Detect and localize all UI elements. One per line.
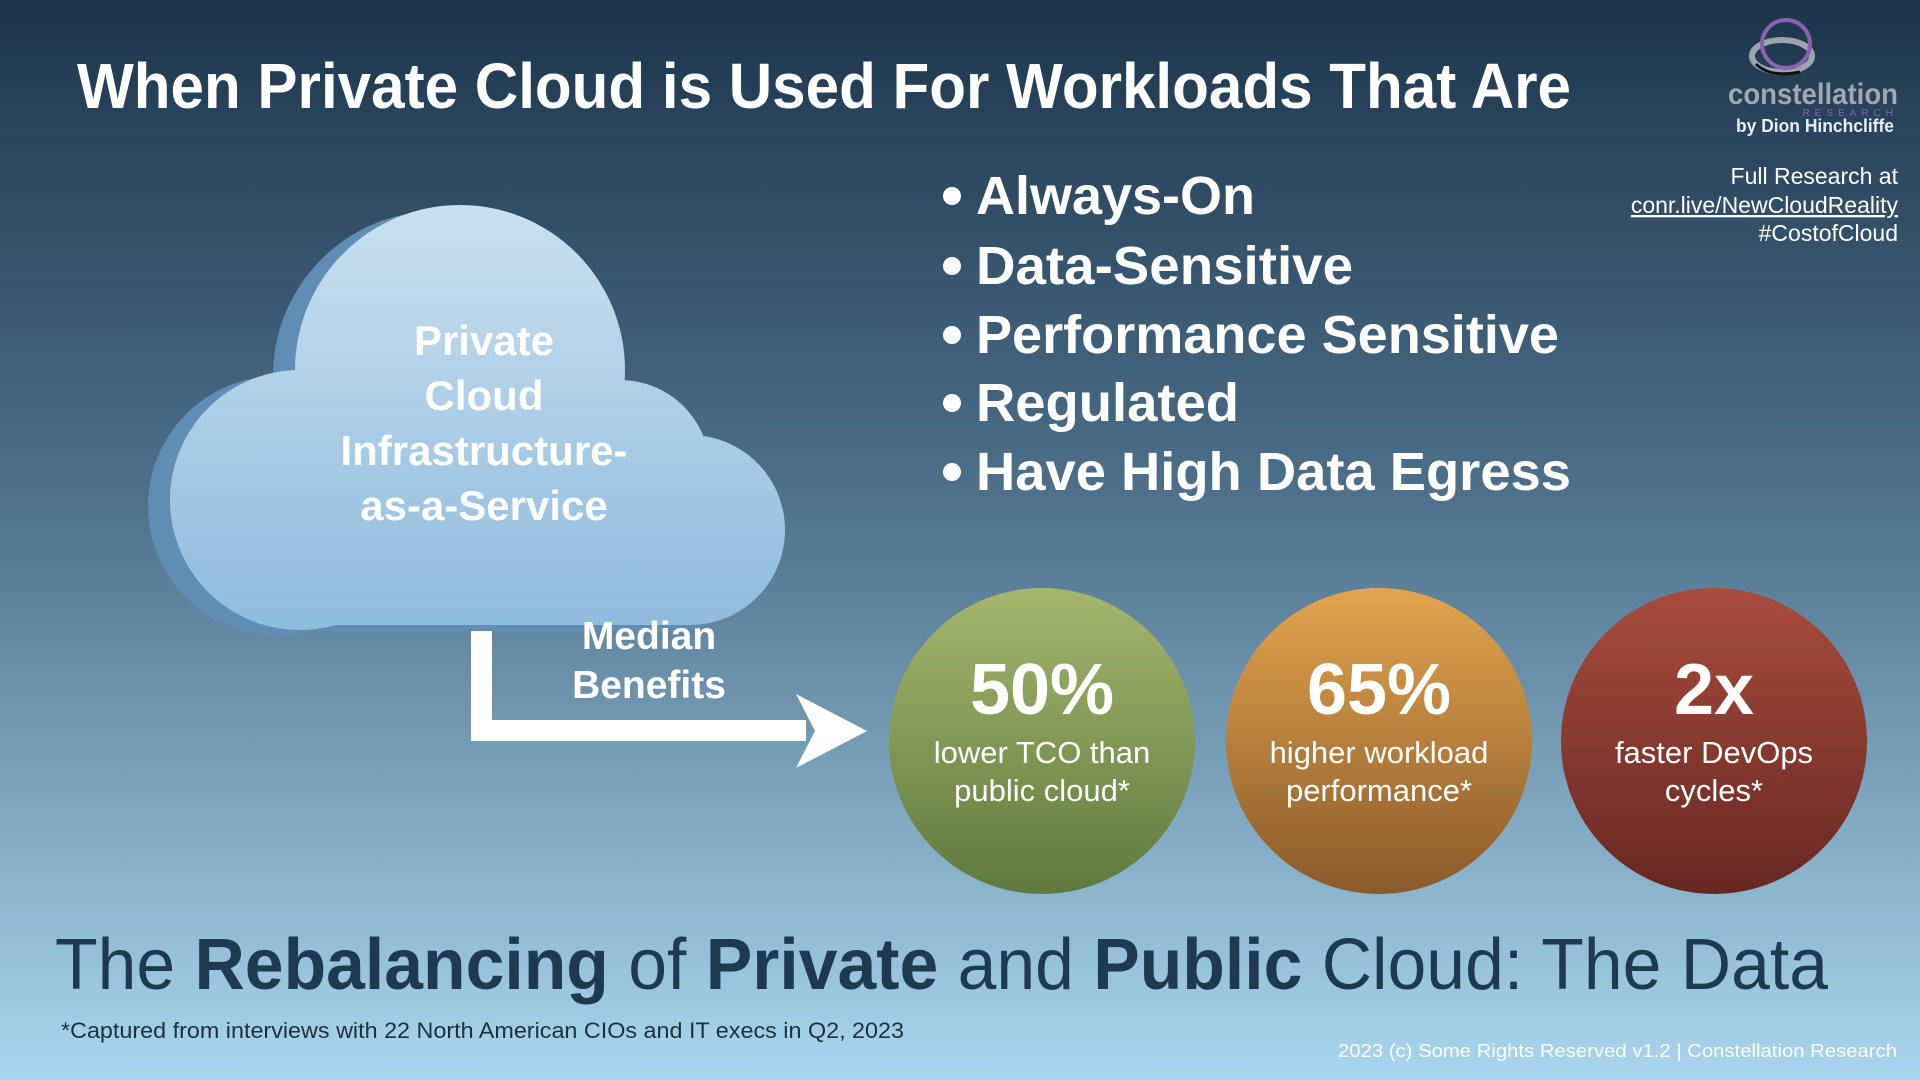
bullet list: Have High Data Egress — [976, 442, 1571, 502]
cloud label: as-a-Service — [360, 482, 608, 529]
title: When Private Cloud is Used For Workloads That Are — [77, 50, 1571, 122]
bullet list — [943, 166, 1571, 502]
cloud label: Infrastructure- — [340, 427, 628, 474]
median benefits label: Median — [582, 615, 716, 658]
research link text: conr.live/NewCloudReality — [1631, 192, 1898, 218]
circle: 50% — [889, 588, 1195, 894]
circle: 2x — [1561, 588, 1867, 894]
research link text: Full Research at — [1731, 163, 1899, 189]
circle: 65%: performance* — [1286, 773, 1472, 808]
logo: by Dion Hinchcliffe — [1736, 116, 1894, 136]
circle: 50%: public cloud* — [954, 773, 1130, 808]
median benefits label: Benefits — [572, 664, 726, 707]
circle: 50%: 50% — [970, 650, 1114, 730]
circle: 2x: faster DevOps — [1615, 735, 1813, 770]
circle: 2x: 2x — [1674, 650, 1754, 730]
circle: 65%: 65% — [1307, 650, 1451, 730]
circle: 65%: higher workload — [1270, 735, 1488, 770]
logo: RESEARCH — [1802, 108, 1898, 119]
bullet list: Performance Sensitive — [976, 305, 1559, 365]
arrow — [471, 600, 867, 768]
circle: 50%: lower TCO than — [934, 735, 1150, 770]
copyright: 2023 (c) Some Rights Reserved v1.2 | Constellation Research — [1338, 1041, 1897, 1061]
circle: 65% — [1226, 588, 1532, 894]
logo: constellation — [1728, 78, 1898, 111]
circle: 2x: cycles* — [1665, 773, 1763, 808]
research link text: #CostofCloud — [1759, 220, 1898, 246]
cloud label: Private — [414, 317, 554, 364]
research link text — [1631, 163, 1899, 246]
median benefits label — [572, 615, 726, 707]
footnote: *Captured from interviews with 22 North American CIOs and IT execs in Q2, 2023 — [61, 1018, 904, 1043]
bullet list: Data-Sensitive — [976, 236, 1353, 296]
cloud — [148, 205, 785, 636]
cloud label — [340, 317, 628, 529]
bullet list: Always-On — [976, 166, 1255, 226]
bottom title: The Rebalancing of Private and Public Cloud: The Data — [55, 925, 1829, 1005]
cloud label: Cloud — [425, 372, 543, 419]
bullet list: Regulated — [976, 373, 1239, 433]
logo — [1728, 20, 1898, 136]
